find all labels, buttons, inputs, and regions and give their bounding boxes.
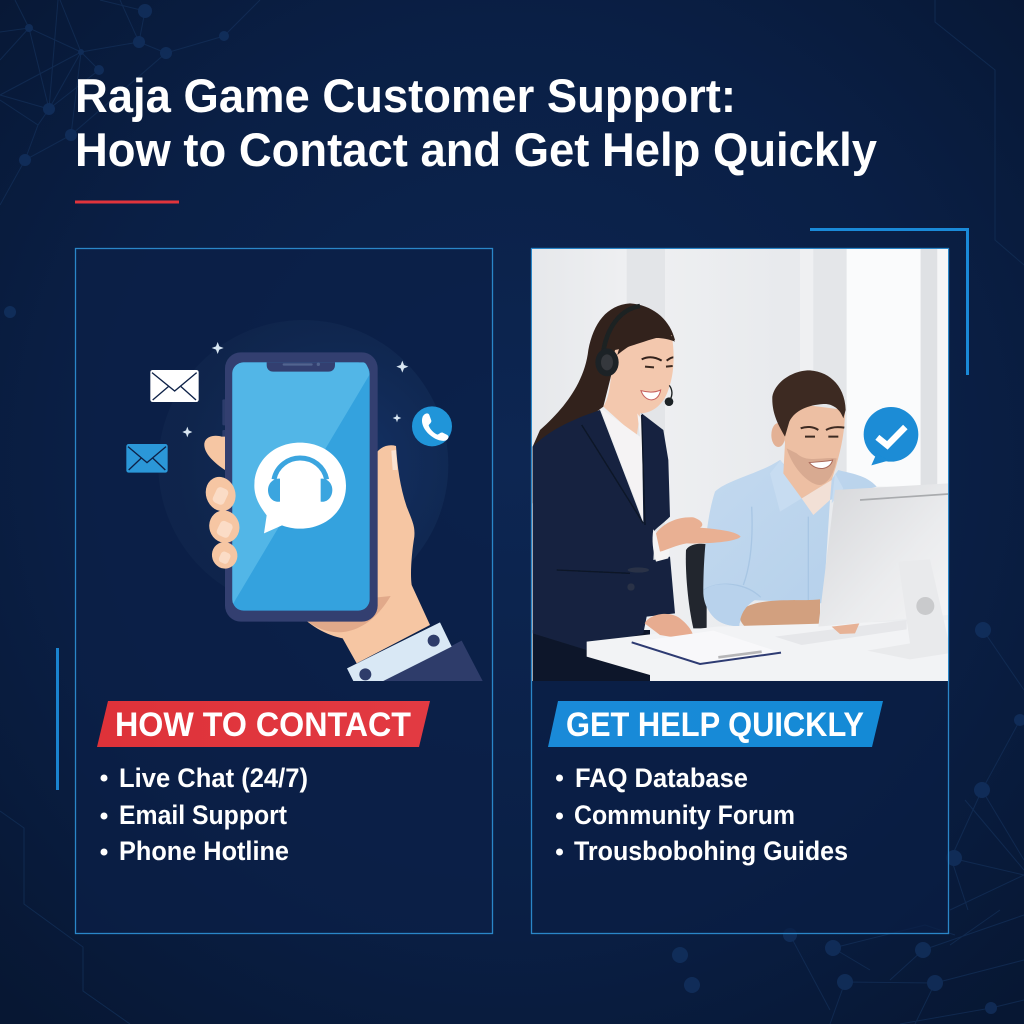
panel frame bbox=[76, 248, 492, 934]
keyboard bbox=[775, 620, 907, 645]
hand back bbox=[307, 445, 430, 663]
man: cuff bbox=[704, 584, 754, 626]
list: contact options bbox=[100, 763, 308, 866]
photo: support agents at desk bbox=[530, 247, 950, 683]
network pattern: bottom right bbox=[672, 622, 1024, 1024]
jacket sleeve bbox=[383, 641, 483, 681]
list: help resources: FAQ Database bbox=[575, 763, 748, 793]
list: help resources: Community Forum bbox=[574, 800, 795, 830]
list: contact options: Email Support bbox=[119, 800, 287, 830]
woman: sleeve crease bbox=[557, 415, 645, 573]
man: neck and face bbox=[783, 403, 845, 498]
man: ear bbox=[771, 423, 785, 447]
network pattern: top left bbox=[0, 0, 260, 318]
woman: hand on desk bbox=[645, 614, 693, 638]
woman: neck and face bbox=[603, 335, 674, 437]
notch bbox=[267, 362, 335, 372]
woman: legs bbox=[533, 630, 650, 682]
screen sheen bbox=[232, 362, 369, 603]
title: How to Contact and Get Help Quickly bbox=[75, 123, 877, 176]
man: chair bbox=[686, 544, 707, 628]
office wall bbox=[530, 247, 950, 683]
man: hair bbox=[772, 370, 846, 437]
woman: hand bbox=[656, 517, 741, 552]
stand hole bbox=[916, 597, 934, 615]
man: shirt bbox=[703, 460, 877, 626]
sparkles bbox=[182, 342, 408, 437]
title underline bbox=[75, 200, 179, 204]
list: help resources bbox=[556, 763, 848, 866]
fingers bbox=[201, 436, 244, 572]
shirt cuff bbox=[347, 622, 452, 681]
panel: how to contact bbox=[76, 248, 492, 934]
list: contact options: Live Chat (24/7) bbox=[119, 763, 308, 793]
thumb nail bbox=[391, 450, 397, 470]
banner: get help quickly: GET HELP QUICKLY bbox=[566, 706, 864, 744]
banner: how to contact: HOW TO CONTACT bbox=[115, 706, 411, 744]
woman: hair bbox=[533, 303, 675, 503]
panel: get help quickly bbox=[530, 247, 950, 933]
woman: hair top bbox=[617, 335, 675, 355]
glow circle bbox=[158, 320, 448, 610]
icon: blue envelope bbox=[126, 444, 168, 473]
man: sleeve fold bbox=[704, 507, 808, 602]
woman: cuff bbox=[653, 529, 670, 562]
network pattern: bottom left bbox=[0, 811, 130, 1024]
man: fingers bbox=[832, 623, 859, 634]
monitor bbox=[818, 483, 948, 627]
man: features bbox=[801, 427, 844, 469]
woman: features bbox=[641, 357, 673, 400]
clipboard bbox=[632, 631, 781, 664]
palm shadow bbox=[308, 596, 391, 632]
desk bbox=[586, 622, 865, 680]
top right corner accent bbox=[810, 230, 968, 375]
cuff buttons bbox=[359, 635, 440, 680]
woman: shirt bbox=[601, 408, 647, 523]
icon: white envelope bbox=[150, 370, 199, 402]
icon: headset speech bubble bbox=[254, 443, 346, 533]
monitor stand bbox=[869, 602, 948, 659]
network pattern: top right bbox=[935, 0, 1024, 265]
title: Raja Game Customer Support: bbox=[75, 69, 736, 122]
man: forearm bbox=[740, 599, 820, 626]
phone body bbox=[222, 352, 378, 622]
illustration: hand holding phone bbox=[126, 320, 483, 681]
man: collar bbox=[770, 460, 843, 512]
headset bbox=[595, 306, 673, 406]
list: contact options: Phone Hotline bbox=[119, 836, 289, 866]
man: stubble bbox=[787, 448, 837, 485]
panel frame bbox=[532, 248, 948, 934]
icon: phone call bbox=[412, 406, 452, 446]
left accent line bbox=[56, 648, 59, 790]
list: help resources: Trousbobohing Guides bbox=[574, 836, 848, 866]
woman: buttons bbox=[627, 567, 649, 591]
woman: blazer bbox=[533, 410, 675, 650]
icon: check bubble bbox=[864, 407, 918, 465]
title bbox=[75, 69, 877, 176]
